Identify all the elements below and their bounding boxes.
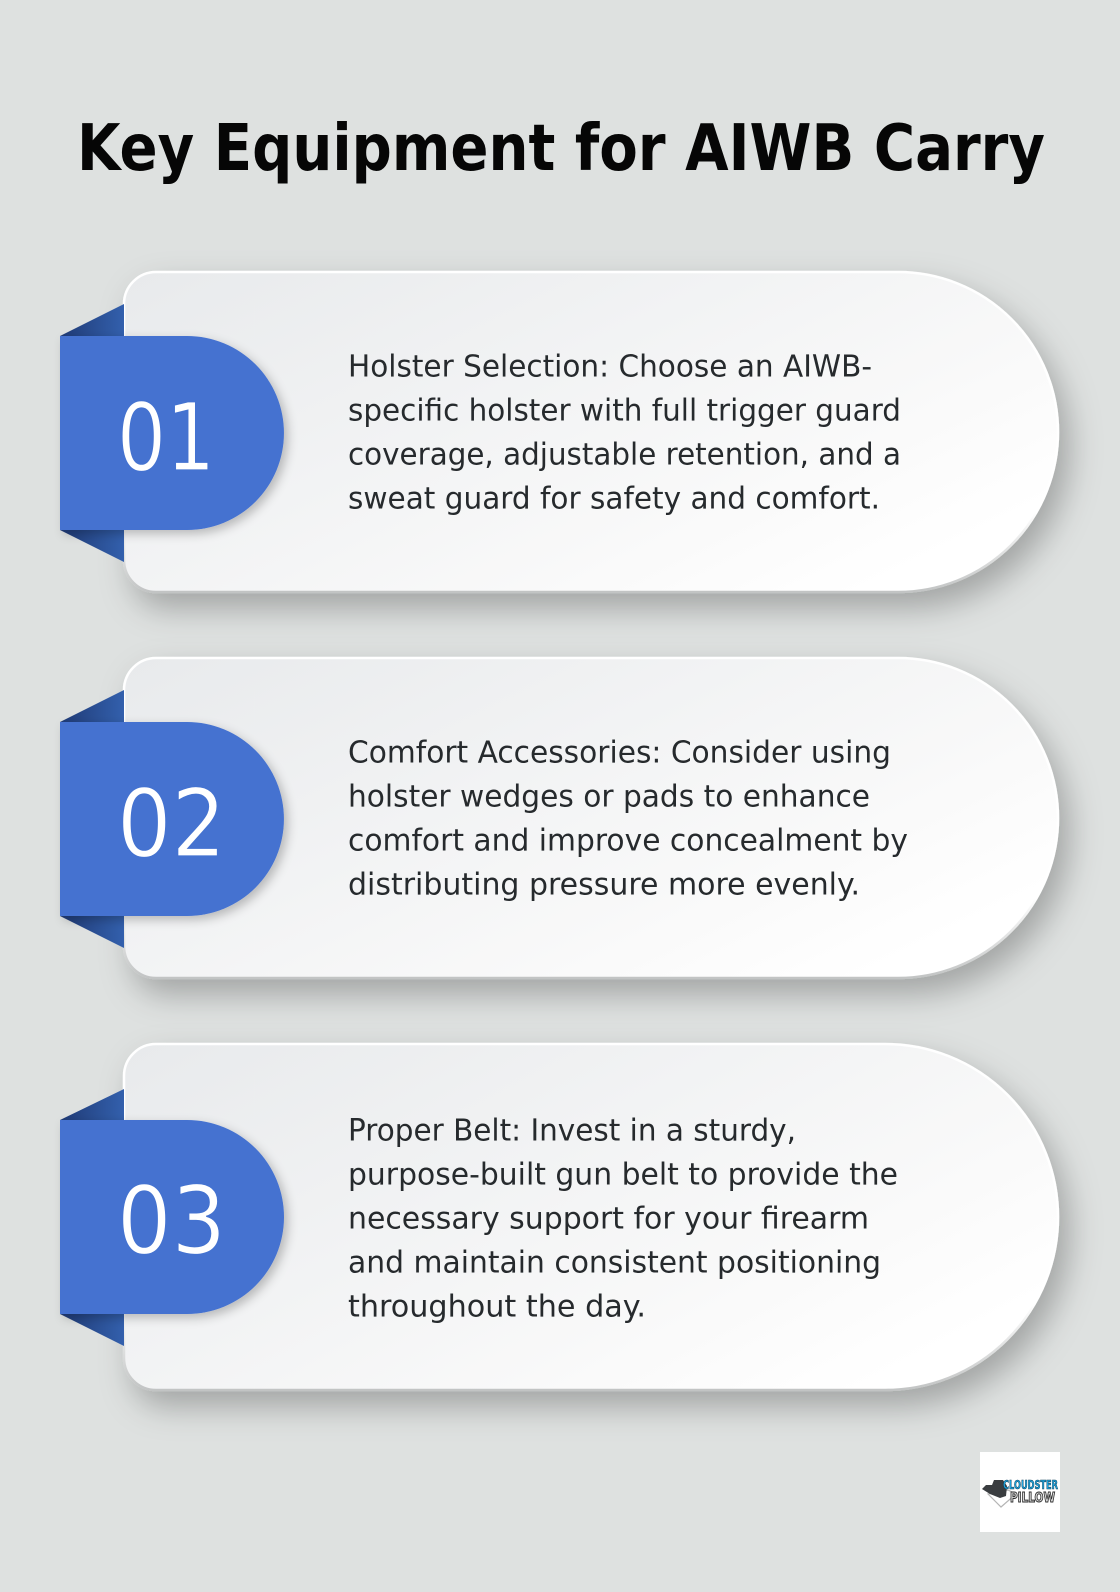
number 01: 01 bbox=[117, 384, 215, 493]
text: proper belt: purpose-built gun belt to provide the bbox=[348, 1158, 898, 1192]
panel: step 03 proper belt bbox=[60, 1044, 1058, 1390]
number 03: 03 bbox=[117, 1167, 226, 1276]
ribbon fold top 02 bbox=[60, 690, 124, 722]
text: proper belt: Proper Belt: Invest in a sturdy, bbox=[348, 1114, 796, 1148]
number badge 02 bbox=[60, 722, 284, 916]
number badge 01 bbox=[60, 336, 284, 530]
card 02 bbox=[124, 658, 1058, 978]
text: holster selection: specific holster with full trigger guard bbox=[348, 394, 901, 428]
text: comfort accessories: holster wedges or pads to enhance bbox=[348, 780, 870, 814]
text: holster selection: coverage, adjustable retention, and a bbox=[348, 438, 901, 472]
number badge 03 bbox=[60, 1120, 284, 1314]
text: proper belt: necessary support for your firearm bbox=[348, 1202, 869, 1236]
text: holster selection: sweat guard for safety and comfort. bbox=[348, 482, 880, 516]
number 02: 02 bbox=[117, 770, 226, 879]
panel: step 01 holster selection bbox=[60, 272, 1058, 592]
text: comfort accessories: Comfort Accessories: Consider using bbox=[348, 736, 891, 770]
logo: Cloudster Pillow bbox=[980, 1452, 1060, 1532]
text: holster selection: Holster Selection: Choose an AIWB- bbox=[348, 350, 872, 384]
card 03 bbox=[124, 1044, 1058, 1390]
text: comfort accessories: comfort and improve concealment by bbox=[348, 824, 908, 858]
text: proper belt: and maintain consistent positioning bbox=[348, 1246, 881, 1280]
panel: step 02 comfort accessories bbox=[60, 658, 1058, 978]
card 01 bbox=[124, 272, 1058, 592]
ribbon fold bottom 02 bbox=[60, 916, 124, 948]
ribbon fold top 03 bbox=[60, 1089, 124, 1120]
ribbon fold bottom 01 bbox=[60, 530, 124, 562]
ribbon fold bottom 03 bbox=[60, 1314, 124, 1346]
logo: Cloudster Pillow: CLOUDSTER bbox=[1003, 1478, 1058, 1492]
text: comfort accessories: distributing pressure more evenly. bbox=[348, 868, 860, 902]
text: proper belt: throughout the day. bbox=[348, 1290, 646, 1324]
ribbon fold top 01 bbox=[60, 304, 124, 336]
logo: Cloudster Pillow: PILLOW bbox=[1010, 1490, 1055, 1506]
